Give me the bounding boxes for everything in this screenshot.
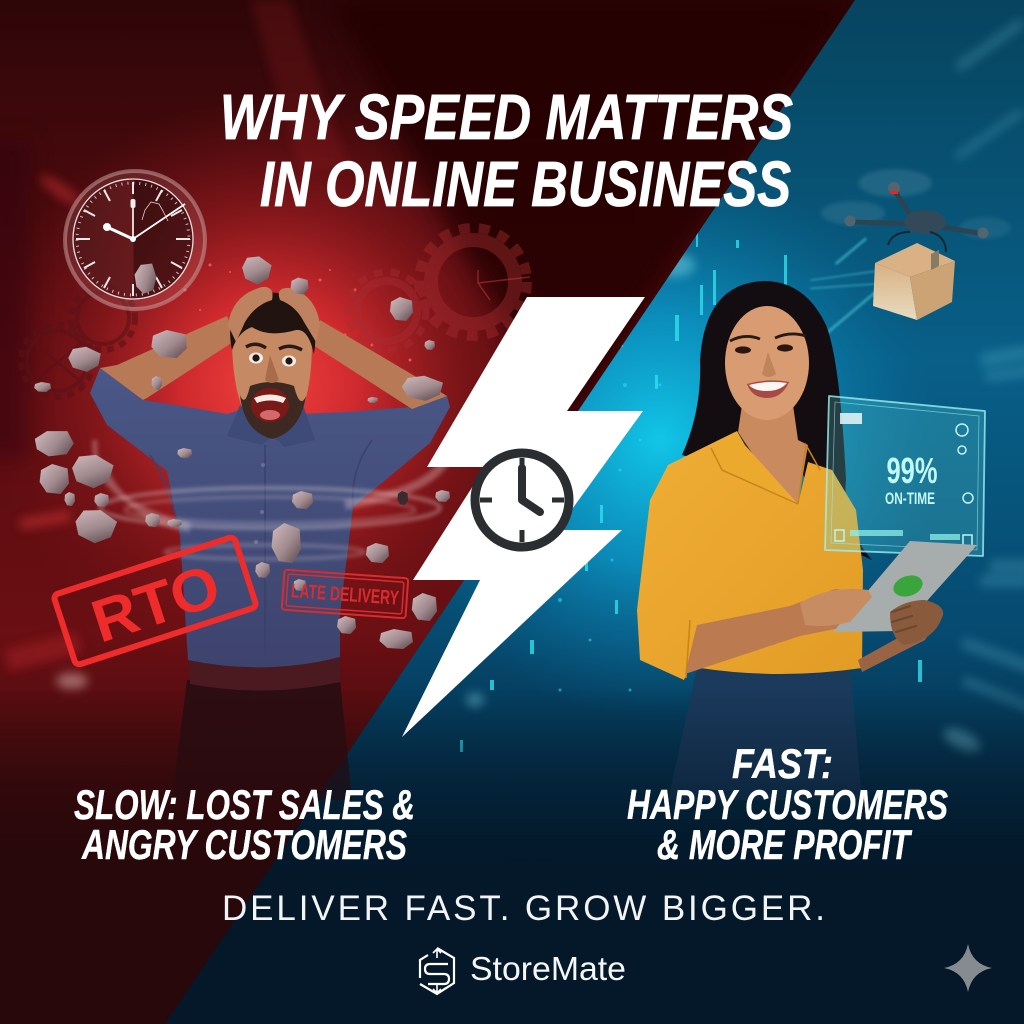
icon: delivery drone with parcel xyxy=(821,169,1011,320)
wind swirl around the torso xyxy=(95,440,450,559)
gears behind the man xyxy=(21,228,530,397)
logo: StoreMate: StoreMate xyxy=(470,950,626,987)
panel: fast side blue background xyxy=(63,0,1024,870)
figure: smiling woman xyxy=(637,281,943,800)
holographic 99% on-time panel: 99% xyxy=(886,450,938,491)
stamp: late delivery xyxy=(282,570,408,618)
holographic 99% on-time panel xyxy=(825,396,985,556)
panel: slow side red background xyxy=(0,0,855,832)
woman jeans xyxy=(668,666,862,800)
caption: fast: FAST: xyxy=(732,740,833,787)
flying rock debris xyxy=(31,252,450,649)
woman finger hand on tablet xyxy=(800,589,872,626)
woman neck xyxy=(738,405,808,504)
figure: stressed man xyxy=(90,287,450,800)
stamp: late delivery: LATE DELIVERY xyxy=(290,580,400,610)
stamp: RTO xyxy=(53,536,257,666)
logo mark xyxy=(420,948,454,994)
man forearms xyxy=(100,316,447,409)
woman face xyxy=(724,290,812,420)
icon: clock in bolt xyxy=(475,453,569,547)
man neck xyxy=(250,415,295,440)
bottom fade xyxy=(0,718,1024,1024)
man head xyxy=(230,293,315,439)
caption: slow: ANGRY CUSTOMERS xyxy=(81,821,407,868)
stamp: RTO: RTO xyxy=(84,551,228,655)
man hands on head xyxy=(228,287,320,342)
icon: cracked wall clock xyxy=(65,171,205,309)
woman back hair xyxy=(682,281,872,560)
title: WHY SPEED MATTERS xyxy=(220,81,793,153)
title: IN ONLINE BUSINESS xyxy=(260,148,791,220)
caption: fast xyxy=(627,740,948,868)
caption: fast: & MORE PROFIT xyxy=(657,821,913,868)
man shirt and sleeves xyxy=(90,368,450,667)
woman forearm xyxy=(685,589,872,674)
caption: slow xyxy=(74,781,415,868)
tagline: DELIVER FAST. GROW BIGGER. xyxy=(222,889,825,928)
icon: sparkle watermark xyxy=(944,944,992,992)
woman yellow blouse xyxy=(637,431,863,680)
tablet in hand xyxy=(833,541,977,645)
holographic 99% on-time panel: ON-TIME xyxy=(885,489,935,508)
man trousers and belt xyxy=(172,655,352,800)
woman arm behind tablet xyxy=(858,613,943,672)
title xyxy=(220,81,793,220)
logo: StoreMate xyxy=(420,948,626,994)
lightning bolt xyxy=(402,297,645,737)
caption: slow: SLOW: LOST SALES & xyxy=(74,781,415,828)
